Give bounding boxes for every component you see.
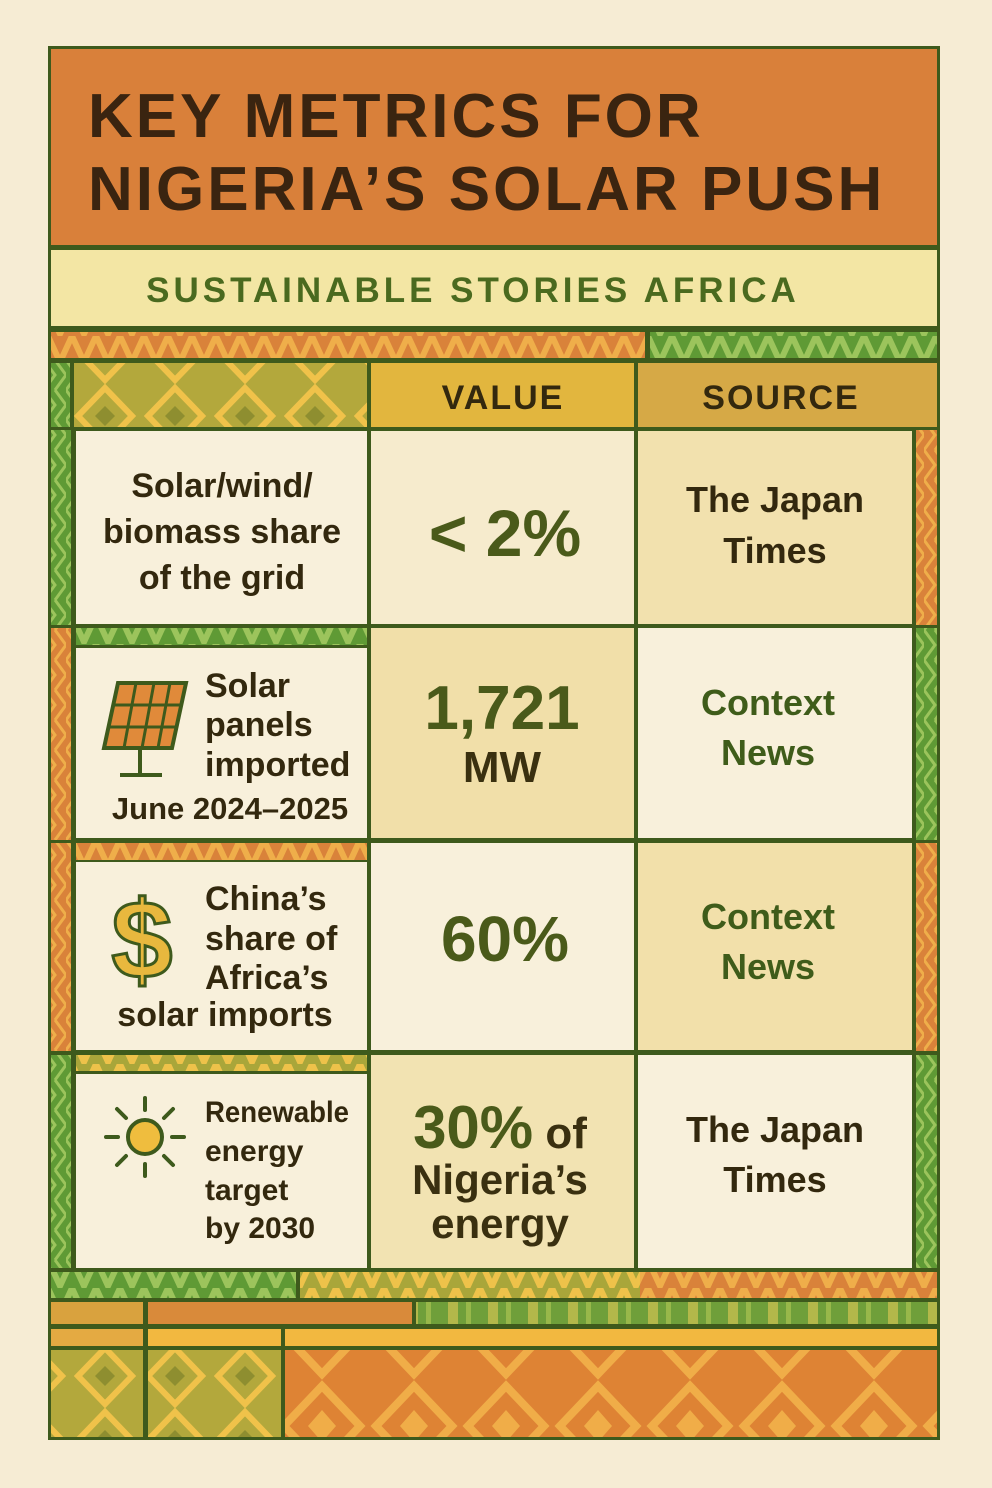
subtitle band <box>51 250 937 326</box>
row 1: of the grid <box>139 559 305 597</box>
icon: sun <box>106 1098 184 1176</box>
row 3 <box>76 843 912 1050</box>
row 3: Context <box>701 896 835 937</box>
row 3: China’s <box>205 880 327 918</box>
table header <box>51 363 937 427</box>
row 3: share of <box>205 920 338 958</box>
row 2: panels <box>205 706 313 744</box>
row 2: June 2024–2025 <box>112 791 348 826</box>
row 4: The Japan <box>686 1109 864 1150</box>
row 4: by 2030 <box>205 1212 315 1245</box>
title band: NIGERIA’S SOLAR PUSH <box>88 155 885 224</box>
row 3: 60% <box>441 903 569 975</box>
row 2: 1,721 <box>424 674 580 743</box>
row 3: Africa’s <box>205 959 328 997</box>
row 4: 30% of <box>413 1094 587 1161</box>
icon: dollar: $ <box>111 879 173 1002</box>
row 4: energy <box>431 1200 570 1247</box>
bottom pattern bands <box>51 1272 937 1437</box>
row 1: biomass share <box>103 513 341 551</box>
row 2 <box>76 628 912 838</box>
row 1 <box>76 431 912 624</box>
row 4: Nigeria’s <box>412 1156 588 1203</box>
row 1: The Japan <box>686 479 864 520</box>
row 2: imported <box>205 746 350 784</box>
title band: KEY METRICS FOR <box>88 82 704 151</box>
table header: VALUE <box>442 379 564 417</box>
row 4: target <box>205 1174 288 1207</box>
row 3: solar imports <box>117 996 333 1034</box>
table header: SOURCE <box>702 379 860 417</box>
row 1: < 2% <box>429 496 581 570</box>
row 3: News <box>721 946 815 987</box>
title band <box>51 49 937 245</box>
row 4: energy <box>205 1135 304 1168</box>
subtitle band: SUSTAINABLE STORIES AFRICA <box>146 271 800 310</box>
row 4 <box>76 1055 912 1268</box>
row 2: News <box>721 732 815 773</box>
side strips <box>51 430 71 625</box>
pattern strip <box>51 332 937 358</box>
row 1: Times <box>723 530 827 571</box>
row 2: Solar <box>205 667 290 705</box>
row 1: Solar/wind/ <box>131 467 313 505</box>
row 4: Renewable <box>205 1096 349 1129</box>
row 4: Times <box>723 1159 827 1200</box>
row 2: MW <box>463 743 542 792</box>
icon: solar panel <box>104 683 186 775</box>
row 2: Context <box>701 682 835 723</box>
